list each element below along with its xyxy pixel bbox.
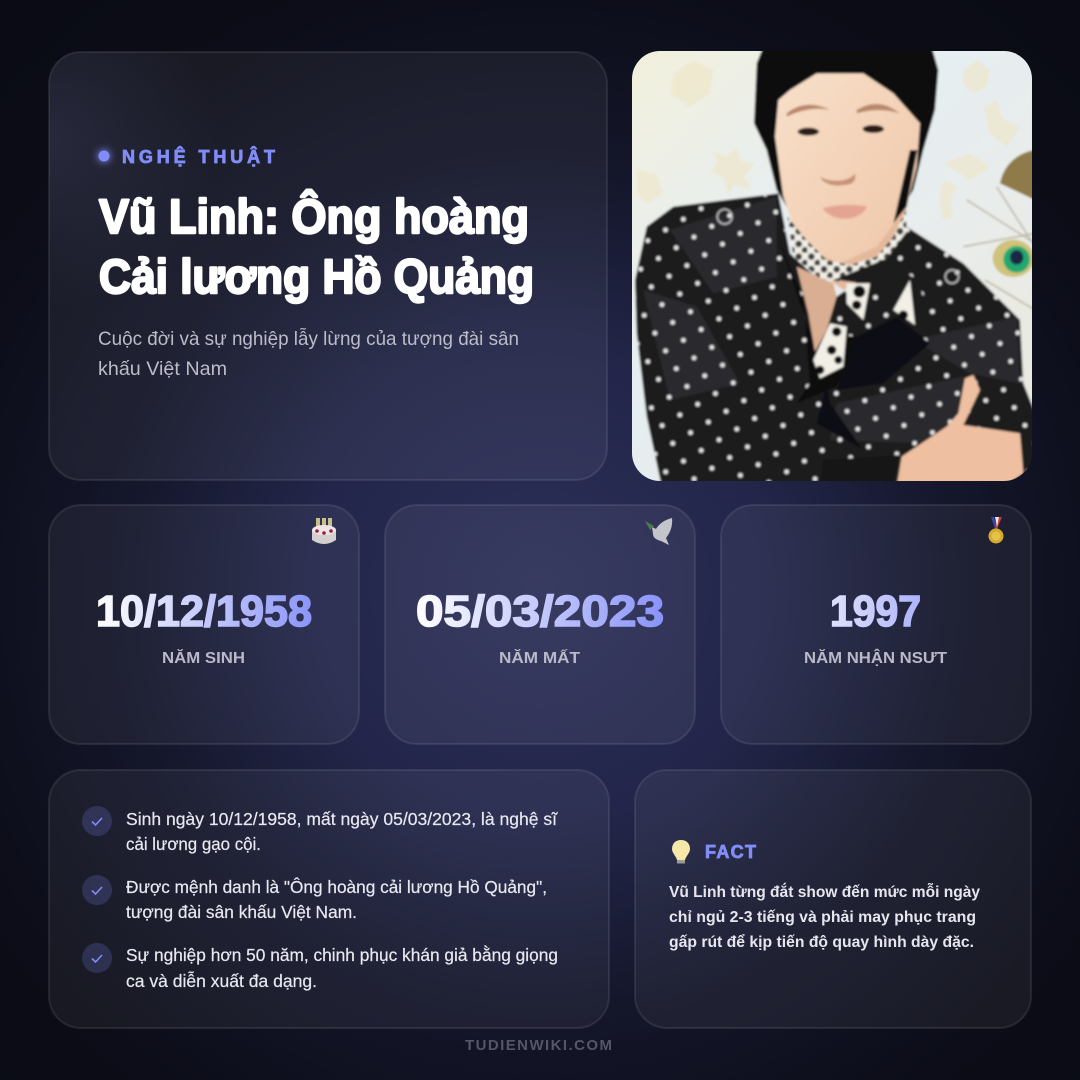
stat label: death: NĂM MẤT <box>499 650 581 667</box>
fact text: chỉ ngủ 2-3 tiếng và phải may phục trang <box>669 909 976 926</box>
stat label: birth: NĂM SINH <box>162 650 245 667</box>
bullet 1: cải lương gạo cội. <box>126 834 261 854</box>
bullet 2 <box>82 875 547 922</box>
peacock feather <box>963 150 1035 310</box>
stat value: death date: 05/03/2023 <box>416 587 664 636</box>
icon: medal <box>988 517 1004 544</box>
fact text: gấp rút để kịp tiến độ quay hình dày đặc. <box>669 933 974 951</box>
face <box>775 73 920 263</box>
subtitle: khấu Việt Nam <box>98 358 227 380</box>
panel: stat award <box>721 505 1031 744</box>
chest skin <box>797 267 837 352</box>
neck <box>823 205 908 291</box>
fact text: Vũ Linh từng đắt show đến mức mỗi ngày <box>669 882 980 901</box>
eyebrow: category: NGHỆ THUẬT <box>122 146 275 167</box>
panel: stat birth <box>49 505 359 744</box>
subtitle <box>98 327 519 380</box>
cuff <box>828 454 900 481</box>
hair back <box>754 47 938 217</box>
bullet 2: tượng đài sân khấu Việt Nam. <box>126 902 357 922</box>
panel: stat death <box>385 505 695 744</box>
stat label: award: NĂM NHẬN NSƯT <box>804 649 948 667</box>
panel: hero <box>49 52 607 480</box>
stat value: award year: 1997 <box>830 587 921 636</box>
scarf <box>787 210 930 378</box>
fact text <box>669 882 980 951</box>
footer: source: TUDIENWIKI.COM <box>465 1037 612 1054</box>
shirt <box>635 193 1037 487</box>
title <box>99 189 534 304</box>
icon: light bulb <box>672 840 690 864</box>
hand <box>897 375 1023 487</box>
bullet 1: Sinh ngày 10/12/1958, mất ngày 05/03/2023, là nghệ sĩ <box>126 809 558 829</box>
bullet 1 <box>82 806 558 854</box>
panel: key points <box>49 770 609 1028</box>
bullet 3: ca và diễn xuất đa dạng. <box>126 970 317 991</box>
panel: fact <box>635 770 1031 1028</box>
stat value: birth date: 10/12/1958 <box>96 587 312 636</box>
fact heading: FACT <box>705 842 756 862</box>
subtitle: Cuộc đời và sự nghiệp lẫy lừng của tượng đài sân <box>98 327 519 350</box>
bullet 3: Sự nghiệp hơn 50 năm, chinh phục khán giả bằng giọng <box>126 944 558 965</box>
bullet 3 <box>82 943 558 991</box>
title: Cải lương Hồ Quảng <box>99 251 534 304</box>
bullet 2: Được mệnh danh là "Ông hoàng cải lương Hồ Quảng", <box>126 876 547 897</box>
icon: birthday cake <box>312 518 336 544</box>
icon: dove <box>645 518 672 545</box>
photo: portrait <box>623 43 1042 490</box>
title: Vũ Linh: Ông hoàng <box>99 189 529 244</box>
